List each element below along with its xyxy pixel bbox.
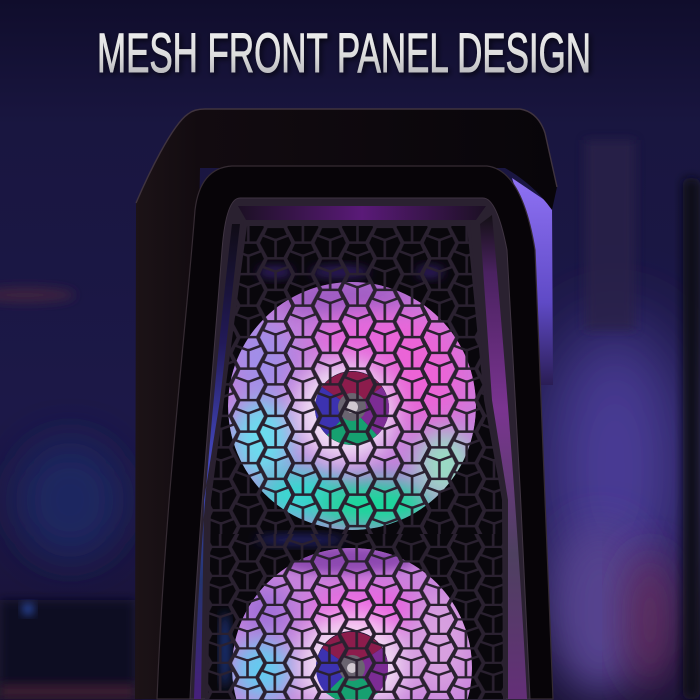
case right side panel glow [512, 178, 553, 385]
inner top purple strip [238, 206, 486, 220]
third bezel [190, 198, 530, 699]
fan 2 hub [316, 631, 388, 699]
dark behind mesh [208, 226, 503, 699]
second bezel [157, 166, 553, 699]
fan 1 glow [228, 280, 476, 530]
fan 2 glow [232, 546, 472, 699]
case top highlight [136, 109, 557, 203]
right magenta strip [480, 215, 527, 699]
mesh openings with fans behind [208, 226, 503, 699]
left blue strip [194, 224, 240, 699]
case body [135, 109, 557, 699]
fan 1 hub [315, 371, 389, 445]
PC case [135, 109, 557, 699]
mesh frame [205, 222, 506, 699]
